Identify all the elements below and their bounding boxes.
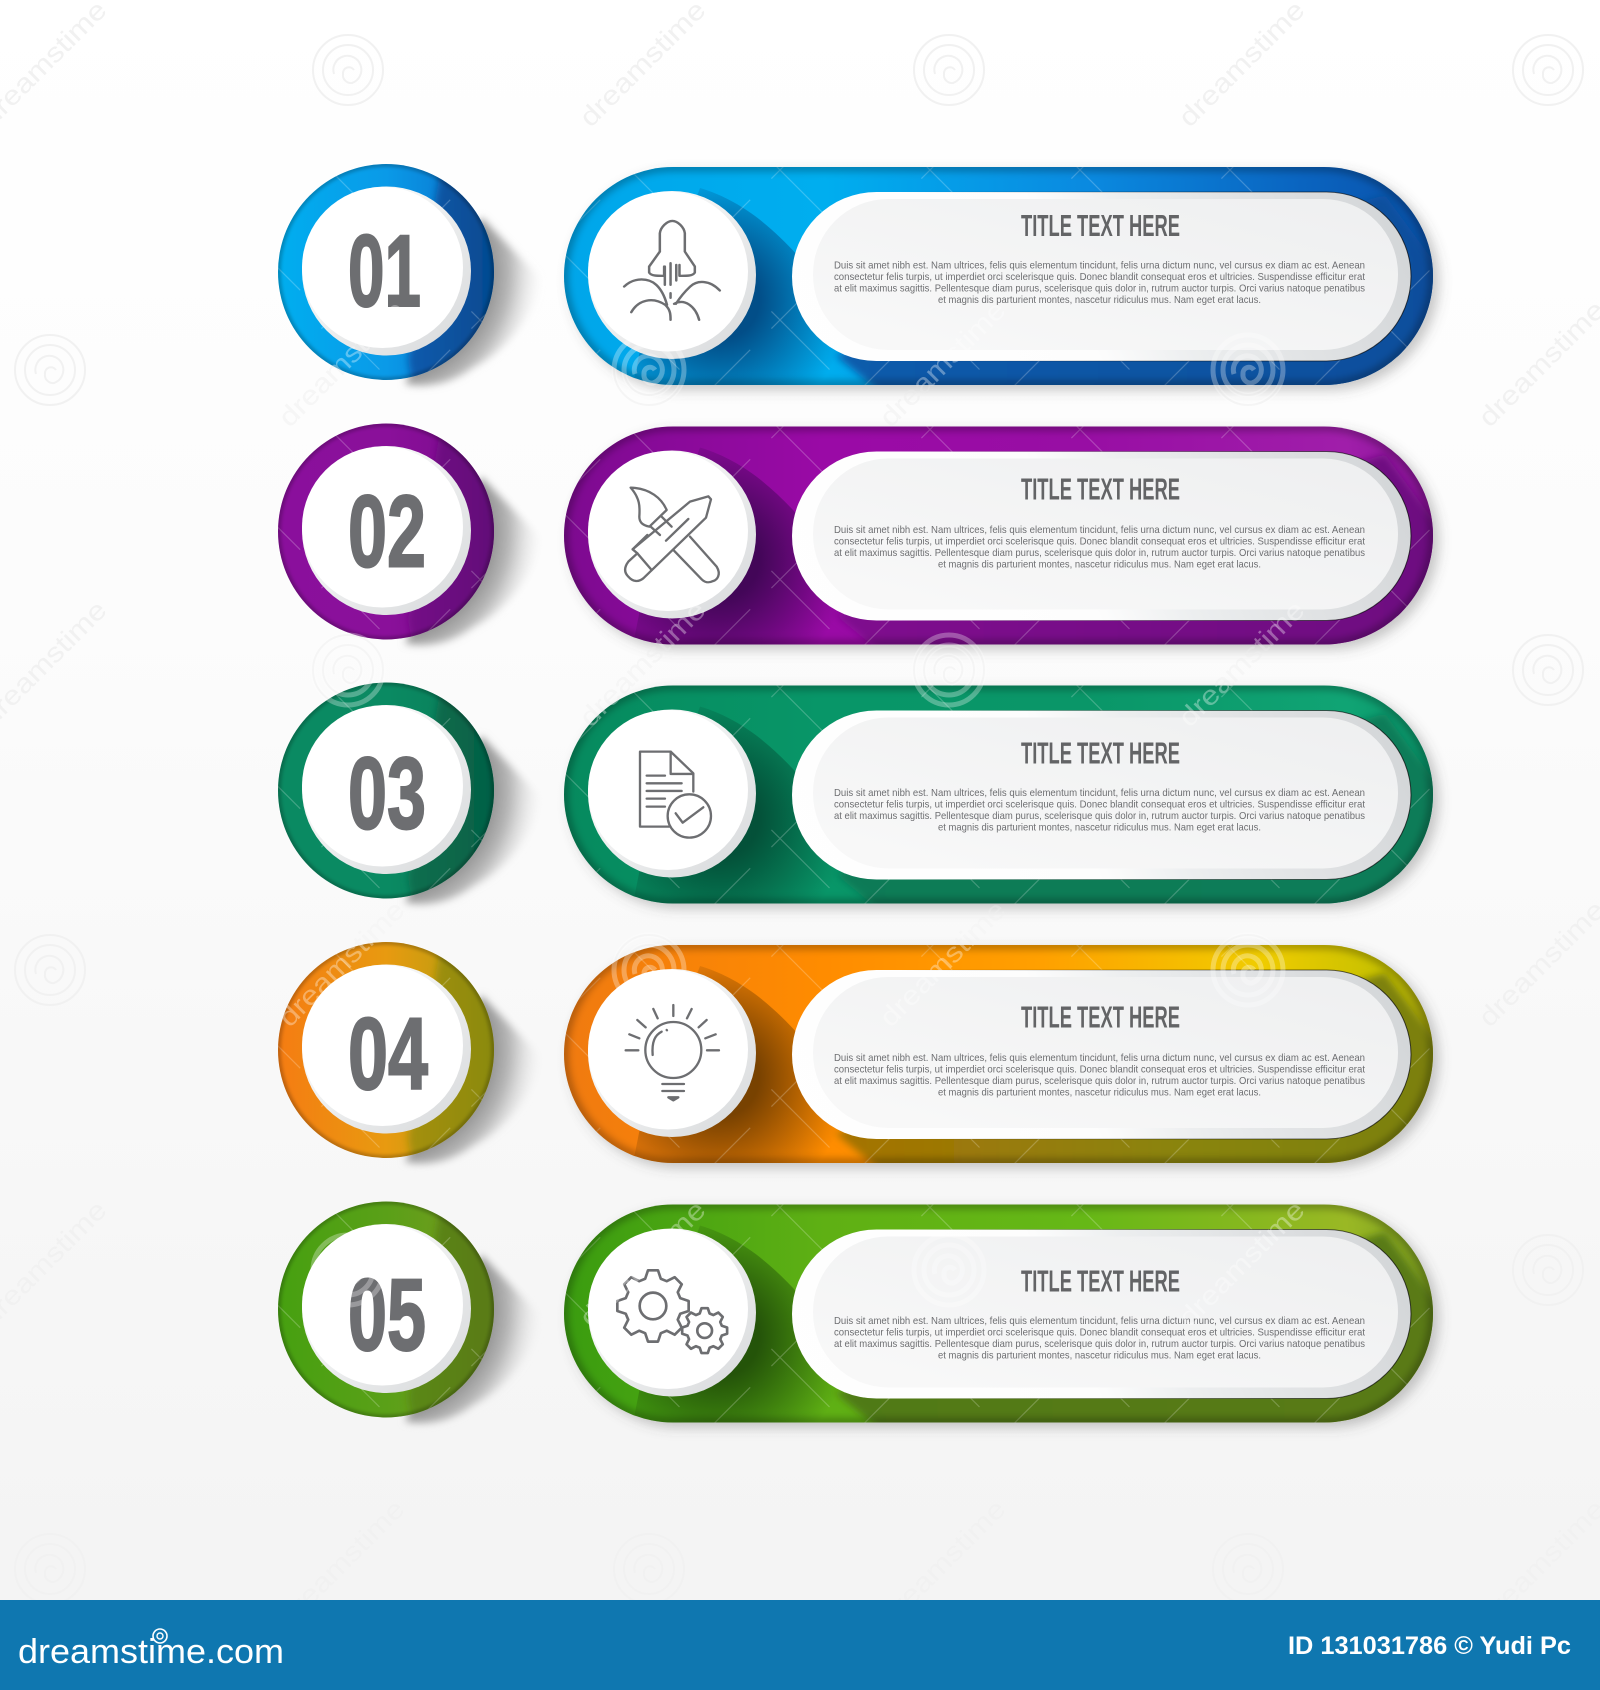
watermark: background layer: dreamstime <box>273 895 411 1033</box>
watermark: background layer: dreamstime <box>874 1494 1012 1632</box>
number badge 01: 01 <box>348 214 421 328</box>
pill card 5 <box>564 1204 1440 1438</box>
icon: rocket launch <box>624 221 720 320</box>
title 3: TITLE TEXT HERE <box>1021 736 1180 770</box>
watermark: overlay layer: dreamstime <box>874 295 1012 433</box>
image credit: ID 131031786 © Yudi Pc <box>1288 1632 1571 1660</box>
body text 1: at elit maximus sagittis. Pellentesque diam purus, scelerisque quis dolor in, rutrum auctor turpis. Orci varius natoque penatibus <box>834 282 1365 294</box>
number badge 02 <box>278 424 538 660</box>
body text 5: consectetur felis turpis, ut imperdiet orci scelerisque quis. Donec blandit consequat eros et ultricies. Suspendisse efficitur erat <box>834 1326 1365 1338</box>
body text 2: at elit maximus sagittis. Pellentesque diam purus, scelerisque quis dolor in, rutrum auctor turpis. Orci varius natoque penatibus <box>834 547 1365 559</box>
watermark: overlay layer: dreamstime <box>1173 1195 1311 1333</box>
number badge 02: 02 <box>348 474 426 588</box>
icon: brush and pencil <box>625 488 719 582</box>
watermark: background layer: dreamstime <box>574 0 712 133</box>
body text 5: et magnis dis parturient montes, nascetur ridiculus mus. Nam eget erat lacus. <box>938 1350 1261 1362</box>
title 2: TITLE TEXT HERE <box>1021 472 1180 506</box>
watermark: background layer: dreamstime <box>1473 895 1600 1033</box>
watermark: overlay layer: dreamstime <box>574 595 712 733</box>
watermark: overlay layer: dreamstime <box>1173 595 1311 733</box>
watermark: background layer: dreamstime <box>874 895 1012 1033</box>
body text 3: Duis sit amet nibh est. Nam ultrices, felis quis elementum tincidunt, felis urna dictum nunc, vel cursus ex diam ac est. Aenean <box>834 787 1365 799</box>
watermark: background layer: dreamstime <box>1173 595 1311 733</box>
body text 3: consectetur felis turpis, ut imperdiet orci scelerisque quis. Donec blandit consequat eros et ultricies. Suspendisse efficitur erat <box>834 798 1365 810</box>
body text 2: et magnis dis parturient montes, nascetur ridiculus mus. Nam eget erat lacus. <box>938 558 1261 570</box>
number badge 05 <box>278 1202 538 1438</box>
number badge 04: 04 <box>348 997 428 1111</box>
footer logo: dreamstime.com <box>18 1633 284 1671</box>
body text 2: consectetur felis turpis, ut imperdiet orci scelerisque quis. Donec blandit consequat eros et ultricies. Suspendisse efficitur erat <box>834 535 1365 547</box>
pill card 2 <box>564 426 1440 660</box>
body text 5 <box>834 1315 1365 1362</box>
watermark: background layer: dreamstime <box>273 1494 411 1632</box>
body text 2 <box>834 524 1365 570</box>
title 1: TITLE TEXT HERE <box>1021 208 1180 243</box>
icon disc 2 <box>588 450 756 618</box>
body text 4: consectetur felis turpis, ut imperdiet orci scelerisque quis. Donec blandit consequat eros et ultricies. Suspendisse efficitur erat <box>834 1064 1365 1076</box>
watermark: overlay layer: dreamstime <box>273 295 411 433</box>
watermark: background layer: dreamstime <box>1173 0 1311 133</box>
panel: row 3 <box>278 682 1440 918</box>
watermark: overlay layer <box>273 295 1311 1333</box>
body text 1 <box>834 260 1365 306</box>
body text 1: et magnis dis parturient montes, nascetur ridiculus mus. Nam eget erat lacus. <box>938 294 1261 306</box>
icon: document with check <box>640 752 711 838</box>
title 5: TITLE TEXT HERE <box>1021 1264 1180 1299</box>
body text 3: et magnis dis parturient montes, nascetur ridiculus mus. Nam eget erat lacus. <box>938 822 1261 834</box>
watermark: background layer: dreamstime <box>1473 1494 1600 1632</box>
icon disc 3 <box>588 710 756 878</box>
watermark: background layer: dreamstime <box>273 295 411 433</box>
body text 2: Duis sit amet nibh est. Nam ultrices, felis quis elementum tincidunt, felis urna dictum nunc, vel cursus ex diam ac est. Aenean <box>834 524 1365 536</box>
icon: light bulb <box>626 1005 719 1100</box>
body text 5: at elit maximus sagittis. Pellentesque diam purus, scelerisque quis dolor in, rutrum auctor turpis. Orci varius natoque penatibus <box>834 1338 1365 1350</box>
watermark: background layer: dreamstime <box>1473 295 1600 433</box>
title 4: TITLE TEXT HERE <box>1021 1000 1180 1034</box>
body text 4: at elit maximus sagittis. Pellentesque diam purus, scelerisque quis dolor in, rutrum auctor turpis. Orci varius natoque penatibus <box>834 1075 1365 1087</box>
icon: gears <box>617 1270 727 1353</box>
panel: row 5 <box>278 1202 1440 1438</box>
watermark: overlay layer: dreamstime <box>874 895 1012 1033</box>
body text 3: at elit maximus sagittis. Pellentesque diam purus, scelerisque quis dolor in, rutrum auctor turpis. Orci varius natoque penatibus <box>834 810 1365 822</box>
number badge 03 <box>278 682 538 918</box>
number badge 04 <box>278 942 538 1178</box>
watermark: background layer: dreamstime <box>1173 1195 1311 1333</box>
body text 5: Duis sit amet nibh est. Nam ultrices, felis quis elementum tincidunt, felis urna dictum nunc, vel cursus ex diam ac est. Aenean <box>834 1315 1365 1327</box>
watermark: background layer: dreamstime <box>574 595 712 733</box>
body text 1: Duis sit amet nibh est. Nam ultrices, felis quis elementum tincidunt, felis urna dictum nunc, vel cursus ex diam ac est. Aenean <box>834 260 1365 272</box>
body text 4: et magnis dis parturient montes, nascetur ridiculus mus. Nam eget erat lacus. <box>938 1086 1261 1098</box>
watermark: background layer: dreamstime <box>574 1195 712 1333</box>
panel: row 1 <box>278 164 1440 400</box>
icon disc 5 <box>588 1228 756 1396</box>
body text 4: Duis sit amet nibh est. Nam ultrices, felis quis elementum tincidunt, felis urna dictum nunc, vel cursus ex diam ac est. Aenean <box>834 1052 1365 1064</box>
pill card 4 <box>564 945 1440 1178</box>
watermark: overlay layer: dreamstime <box>574 1195 712 1333</box>
body text 4 <box>834 1052 1365 1098</box>
pill card 1 <box>564 167 1440 400</box>
body text 3 <box>834 787 1365 834</box>
number badge 05: 05 <box>348 1258 426 1372</box>
icon disc 4 <box>588 969 756 1137</box>
footer bar <box>0 1600 1600 1690</box>
icon disc 1 <box>588 191 756 359</box>
body text 1: consectetur felis turpis, ut imperdiet orci scelerisque quis. Donec blandit consequat eros et ultricies. Suspendisse efficitur erat <box>834 271 1365 283</box>
panel: row 4 <box>278 942 1440 1178</box>
number badge 01 <box>278 164 538 400</box>
watermark: overlay layer: dreamstime <box>273 895 411 1033</box>
number badge 03: 03 <box>348 736 426 850</box>
panel: row 2 <box>278 424 1440 660</box>
watermark: background layer: dreamstime <box>874 295 1012 433</box>
pill card 3 <box>564 686 1440 918</box>
